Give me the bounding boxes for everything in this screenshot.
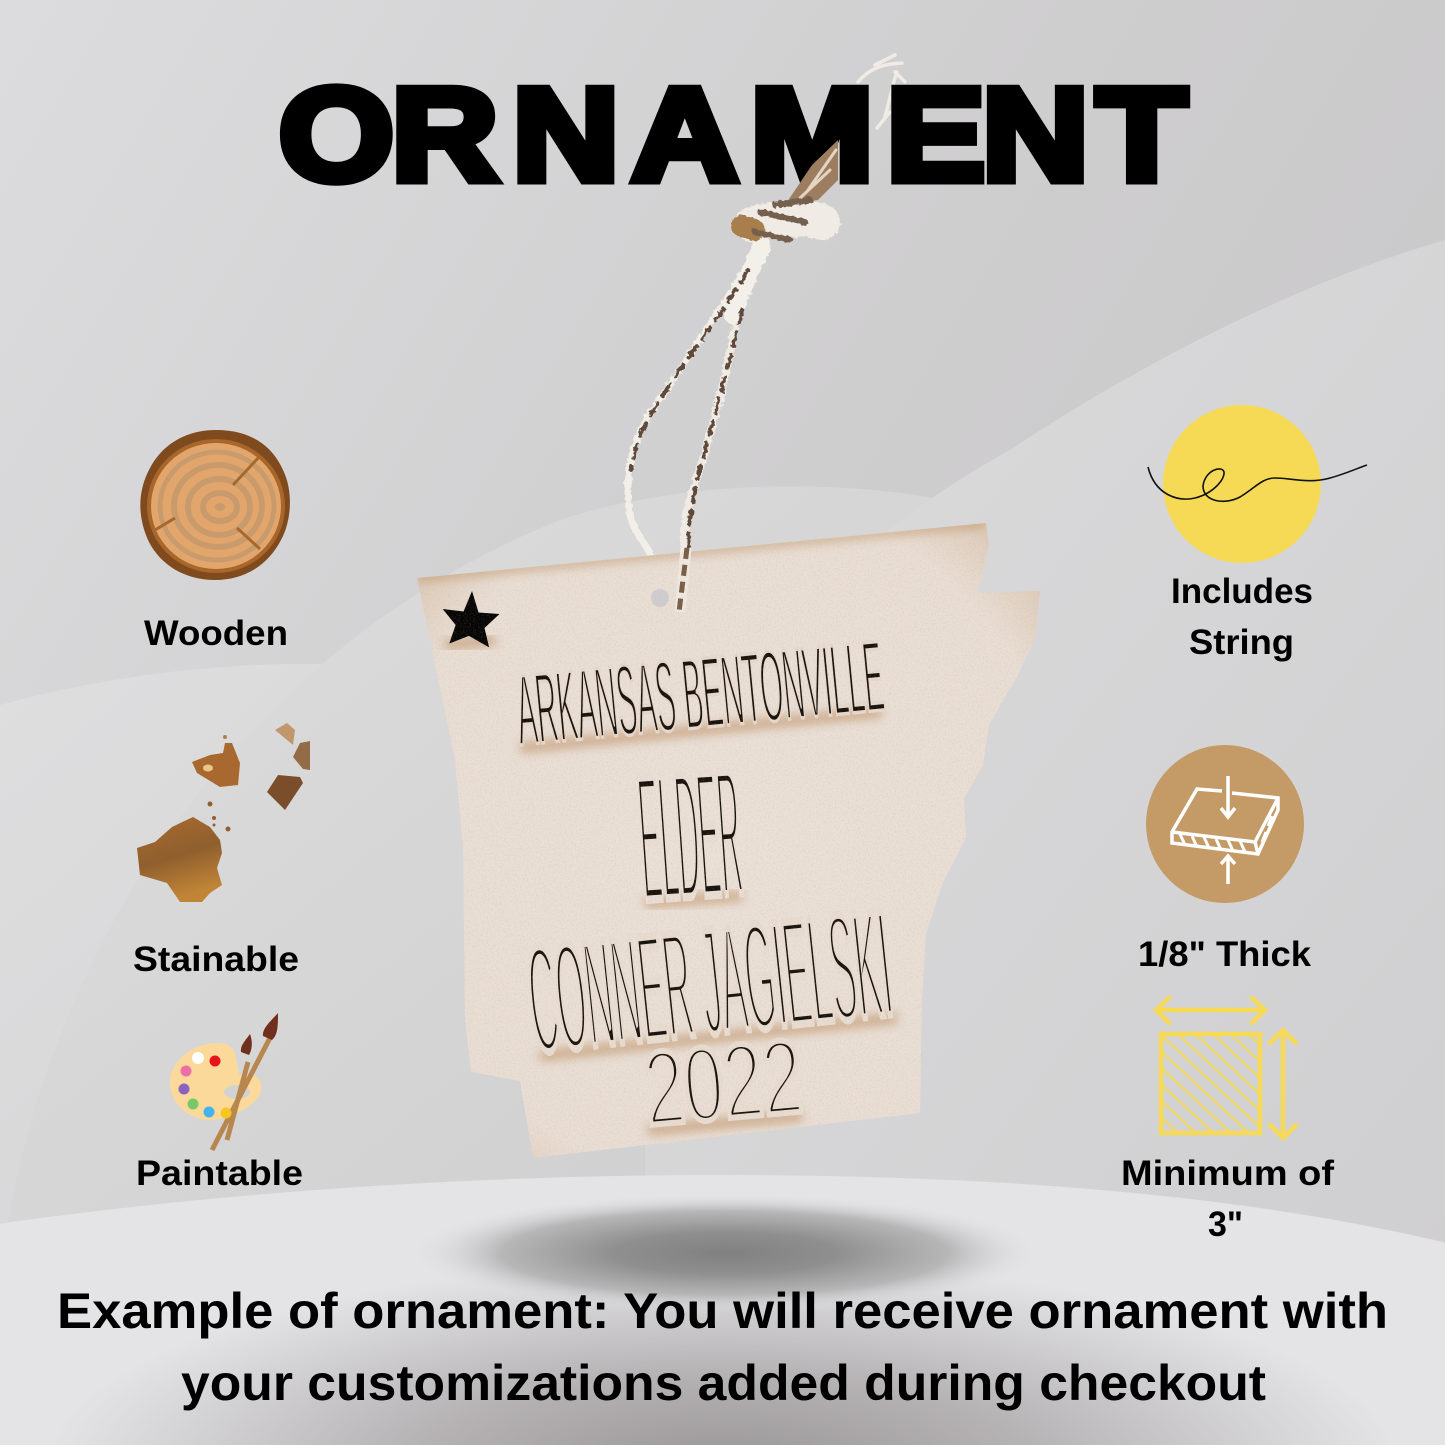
icon: palette [170, 1013, 278, 1150]
label: Includes String: String [1189, 623, 1294, 662]
caption: your customizations added during checkout [181, 1355, 1266, 1411]
string: frayed end [785, 140, 838, 205]
string: knot [752, 218, 822, 224]
ornament grain [417, 523, 1040, 1158]
ornament hole [651, 589, 669, 607]
label: Minimum of 3 inches: Minimum of [1121, 1154, 1334, 1193]
label: Minimum of 3 inches: 3" [1208, 1205, 1243, 1244]
caption [57, 1283, 1388, 1411]
podium [0, 1175, 1445, 1445]
engraved: Conner Jagielski: CONNER JAGIELSKI [521, 880, 899, 1085]
string: strand twist [631, 270, 748, 600]
string [628, 140, 838, 610]
ornament body [417, 523, 1040, 1158]
string: left strand [628, 250, 760, 553]
icon: yellow circle with string [1148, 405, 1367, 563]
podium shadow [407, 1193, 1043, 1313]
title: ORNAMENT [279, 60, 1187, 208]
ornament [417, 523, 1040, 1158]
string fibers behind title [858, 55, 905, 128]
label: Paintable: Paintable [136, 1154, 303, 1193]
engraved: Elder: ELDER [633, 733, 747, 939]
label: 1/8 inch thick: 1/8" Thick [1138, 935, 1312, 974]
engraved text [511, 619, 899, 1147]
engraved: Arkansas Bentonville: ARKANSAS BENTONVILLE [511, 619, 888, 767]
label: Minimum of 3 inches [1121, 1154, 1334, 1244]
label: Includes String: Includes [1171, 572, 1313, 611]
ornament star [440, 589, 501, 648]
icon: stains [137, 723, 310, 902]
laser burn marks [417, 523, 986, 1130]
icon: size square [1156, 998, 1296, 1138]
caption: Example of ornament: You will receive ornament with [57, 1283, 1388, 1339]
string: upper merge [733, 245, 762, 315]
label: Stainable: Stainable [133, 940, 299, 979]
icon: thickness [1146, 745, 1304, 903]
engraved: 2022: 2022 [640, 1017, 807, 1147]
label: Includes String [1171, 572, 1313, 662]
icon: wood slice [140, 430, 290, 580]
string: right strand [682, 255, 757, 610]
label: Wooden: Wooden [144, 614, 288, 653]
string through hole [680, 548, 686, 612]
